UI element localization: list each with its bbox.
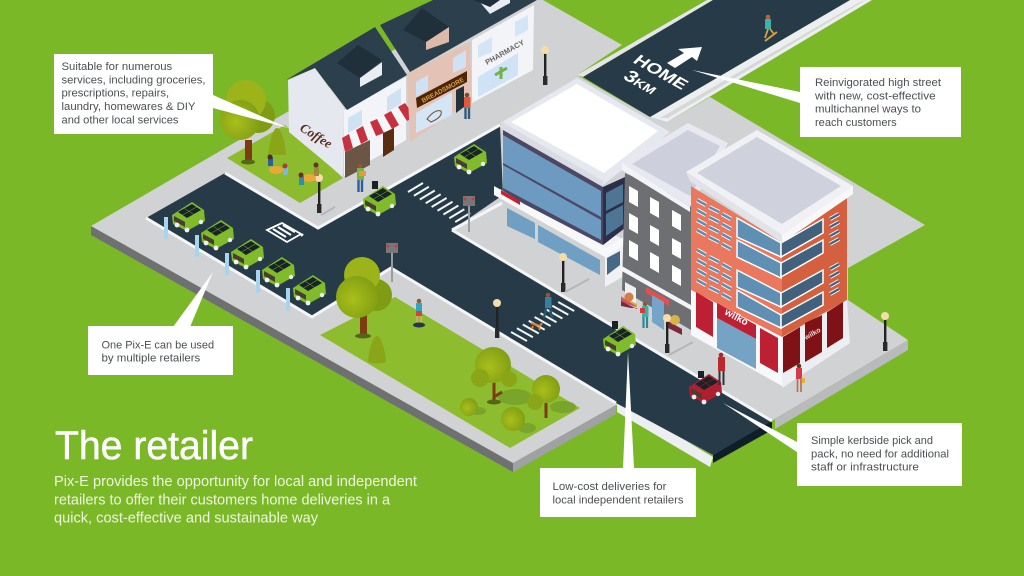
zebra crossing: high street [511, 302, 574, 341]
callout: multiple retailers [88, 272, 233, 375]
kerbs [146, 125, 772, 421]
people [357, 93, 805, 392]
callout: multiple retailers: by multiple retailers [102, 353, 201, 365]
road network [146, 125, 772, 463]
pharmacy [472, 0, 534, 103]
callout: reinvigorated high street: Reinvigorated high street [815, 77, 942, 89]
grass: park [320, 297, 580, 448]
intro text: Pix-E provides the opportunity for local and independent [54, 473, 418, 490]
callout: reinvigorated high street: with new, cost-effective [814, 90, 936, 102]
zebra crossing: junction [408, 183, 470, 222]
intro text [54, 473, 418, 527]
roof [686, 130, 853, 235]
parked Pix-E vehicles [172, 202, 326, 305]
intro text: quick, cost-effective and sustainable way [54, 510, 318, 527]
road: HOME 3KM sign: HOME [629, 52, 692, 93]
road: HOME 3KM sign: 3KM [619, 67, 663, 98]
intro text: retailers to offer their customers home deliveries in a [54, 491, 391, 508]
icon: battery charging bay [267, 223, 303, 242]
ground floor shopfront: wilko [722, 306, 750, 328]
street lamps [315, 46, 889, 355]
small windows [697, 200, 839, 299]
title: The retailer [55, 424, 253, 468]
shop row [286, 0, 537, 178]
callout: low-cost deliveries [540, 352, 696, 517]
shop sign [500, 189, 524, 209]
callout: low-cost deliveries: Low-cost deliveries for [552, 481, 667, 493]
callout: reinvigorated high street [692, 67, 961, 137]
callout: kerbside pick and pack: pack, no need for additional [811, 448, 949, 460]
ground floor shopfront [696, 292, 843, 373]
callout: multiple retailers: One Pix-E can be used [102, 339, 214, 351]
callout: numerous services: Suitable for numerous [62, 61, 173, 73]
traffic lights [386, 196, 475, 282]
callout: numerous services: services, including groceries, [62, 74, 205, 86]
callout: numerous services: prescriptions, repairs, [62, 88, 169, 100]
callout: numerous services: laundry, homewares & DIY [62, 101, 196, 113]
arrow marking [667, 47, 702, 68]
grass: cafe garden [227, 125, 343, 203]
red Pix-E vehicle [689, 371, 722, 404]
large window bands [737, 218, 823, 328]
callout: kerbside pick and pack: Simple kerbside pick and [811, 435, 933, 447]
bakery [380, 0, 537, 142]
callout: reinvigorated high street: reach customers [815, 117, 897, 129]
callout: low-cost deliveries: local independent retailers [552, 494, 684, 506]
cafe tables and diners [268, 154, 319, 185]
charging bollards [166, 217, 288, 311]
callout: numerous services: and other local services [62, 114, 179, 126]
wilko building [686, 130, 853, 388]
flower stalls [621, 292, 682, 335]
coffee shop [286, 27, 415, 178]
cyclist [765, 15, 777, 41]
icon: pharmacy cross [495, 67, 507, 79]
callout: kerbside pick and pack: staff or infrastructure [811, 462, 919, 474]
bakery: BREADSMORE [421, 76, 466, 105]
coffee shop: Coffee [297, 120, 335, 151]
office building with white roof [494, 78, 670, 287]
moving Pix-E vehicles [363, 144, 636, 356]
road: HOME 3KM sign [583, 0, 850, 117]
callout: reinvigorated high street: multichannel ways to [815, 104, 921, 116]
ground floor shopfront: wilko [803, 327, 822, 342]
pharmacy: PHARMACY [484, 38, 526, 67]
grey terraced building [620, 123, 728, 335]
street scene base: pavement [91, 0, 925, 472]
trees: cafe garden [220, 80, 286, 164]
callout: numerous services [54, 54, 288, 134]
callout: kerbside pick and pack [723, 403, 962, 486]
trees: park [336, 257, 560, 431]
